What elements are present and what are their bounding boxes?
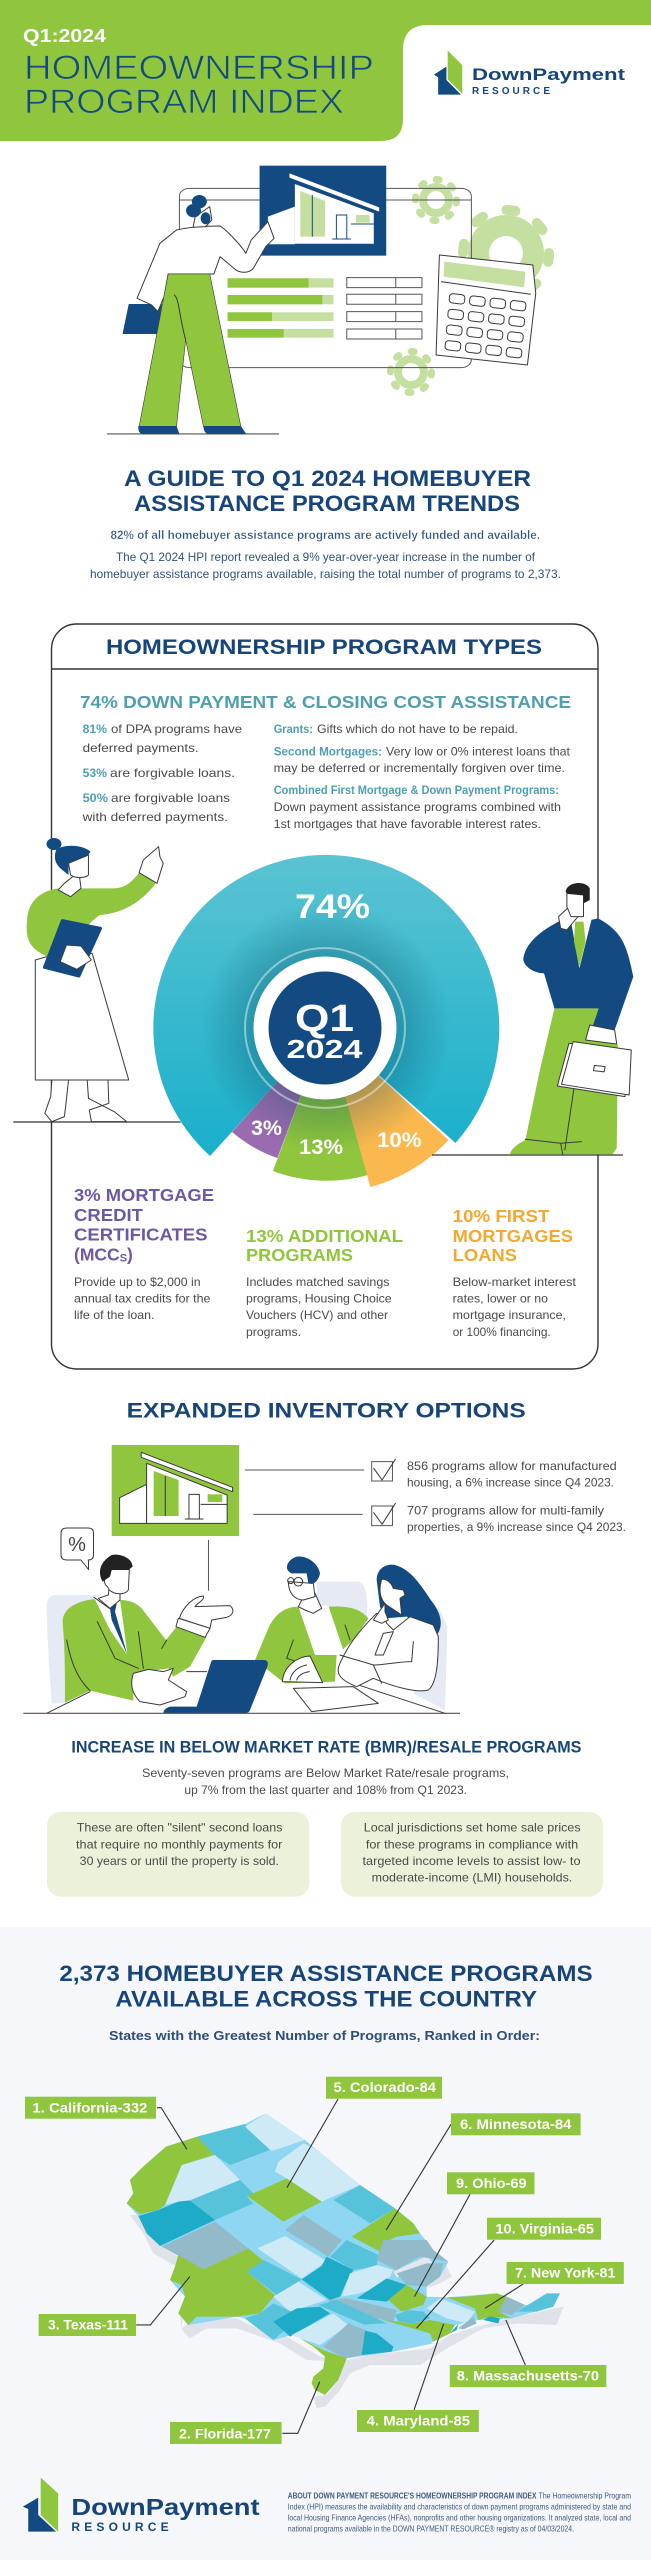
column: 10% first mortgages loans	[453, 1206, 577, 1339]
logo: Down Payment Resource	[434, 51, 625, 97]
callout: local jurisdictions: Local jurisdictions set home sale prices	[364, 1821, 581, 1835]
label: Maryland	[357, 2410, 479, 2432]
icon: percent speech bubble	[61, 1528, 94, 1570]
column: 3% mortgage credit certificates: life of the loan.	[74, 1308, 154, 1322]
column: 3% mortgage credit certificates: S	[120, 1253, 127, 1265]
label: Virginia: 10. Virginia-65	[495, 2221, 595, 2236]
icon: percent speech bubble: %	[68, 1534, 86, 1556]
heading: 2,373 programs	[59, 1961, 593, 2012]
BMR summary text: up 7% from the last quarter and 108% from Q1 2023.	[184, 1783, 467, 1797]
figure: man in green suit	[63, 1555, 233, 1705]
callout: silent second loans	[47, 1812, 309, 1897]
callout: local jurisdictions: targeted income levels to assist low- to	[362, 1854, 581, 1868]
column: 3% mortgage credit certificates: CREDIT	[74, 1205, 143, 1225]
label: Colorado: 5. Colorado-84	[334, 2080, 437, 2095]
main title: HOMEOWNERSHIP	[24, 49, 374, 87]
illustration: person at dashboard	[107, 166, 549, 434]
left column stats: 50%	[83, 791, 108, 805]
connector lines	[208, 1470, 364, 1591]
callout: local jurisdictions: for these programs in compliance with	[366, 1837, 578, 1851]
icon: gears	[390, 180, 549, 392]
state: Texas	[170, 2248, 275, 2325]
logo: Down Payment Resource: RESOURCE	[472, 86, 550, 97]
column: 3% mortgage credit certificates: CERTIFICATES	[74, 1225, 208, 1245]
label: Florida: 2. Florida-177	[179, 2426, 271, 2441]
quarter label: Q1:2024	[23, 26, 106, 46]
label: Ohio	[447, 2172, 534, 2194]
label: Minnesota: 6. Minnesota-84	[460, 2117, 572, 2132]
map land base	[127, 2113, 553, 2358]
icon: laptop	[163, 1660, 268, 1713]
figure: man with glasses	[255, 1556, 368, 1683]
map shadow	[130, 2215, 563, 2408]
column: 10% first mortgages loans: MORTGAGES	[453, 1226, 573, 1246]
intro text: 82% of all homebuyer assistance programs are actively funded and available.	[110, 528, 540, 542]
right column definitions: Combined First Mortgage & Down Payment Programs:	[274, 783, 559, 797]
label: Massachusetts: 8. Massachusetts-70	[457, 2369, 599, 2384]
callout: silent second loans: 30 years or until the property is sold.	[80, 1854, 279, 1868]
panel: map section background	[0, 1927, 651, 2560]
house image card	[260, 166, 386, 256]
intro text	[90, 528, 561, 581]
footer logo: RESOURCE	[71, 2520, 169, 2534]
column: 10% first mortgages loans: LOANS	[453, 1245, 517, 1265]
right column definitions: 1st mortgages that have favorable interest rates.	[274, 817, 541, 831]
multi-family text: properties, a 9% increase since Q4 2023.	[407, 1520, 626, 1534]
chairs	[47, 1582, 447, 1710]
right column definitions: Very low or 0% interest loans that	[386, 745, 571, 759]
right column definitions: Gifts which do not have to be repaid.	[317, 722, 518, 736]
right column definitions: Second Mortgages:	[274, 745, 382, 759]
slice values: 10%	[377, 1129, 422, 1152]
column: 13% additional programs: Includes matched savings	[246, 1275, 390, 1289]
multi-family text: 707 programs allow for multi-family	[407, 1503, 604, 1517]
figure: woman with long hair	[293, 1565, 441, 1712]
footer about text: ABOUT DOWN PAYMENT RESOURCE'S HOMEOWNERSHIP PROGRAM INDEX	[288, 2490, 537, 2500]
map labels	[25, 2077, 624, 2444]
label: New York: 7. New York-81	[515, 2266, 616, 2281]
panel: homeownership program types	[52, 624, 598, 1369]
callout: silent second loans: These are often "silent" second loans	[77, 1821, 282, 1835]
slice values	[251, 888, 422, 1159]
right column definitions: Down payment assistance programs combined with	[274, 800, 561, 814]
column: 3% mortgage credit certificates	[74, 1185, 214, 1322]
pie chart	[153, 855, 499, 1187]
slice: 3%	[232, 1028, 326, 1158]
column: 13% additional programs: 13% ADDITIONAL	[246, 1226, 403, 1246]
slice values: 3%	[251, 1117, 282, 1140]
left column stats: 81%	[83, 722, 107, 736]
left column stats: of DPA programs have	[111, 722, 242, 736]
column: 10% first mortgages loans: mortgage insurance,	[453, 1308, 566, 1322]
callout: silent second loans: that require no monthly payments for	[76, 1837, 282, 1851]
column: 3% mortgage credit certificates: annual tax credits for the	[74, 1292, 211, 1306]
states: west and central	[127, 2113, 420, 2345]
figure: woman pointing	[13, 838, 181, 1122]
label: Colorado	[326, 2077, 442, 2099]
main title: PROGRAM INDEX	[24, 83, 344, 121]
column: 3% mortgage credit certificates: )	[127, 1245, 133, 1265]
label: California	[25, 2097, 156, 2119]
heading: below market rate programs: INCREASE IN BELOW MARKET RATE (BMR)/RESALE PROGRAMS	[71, 1739, 581, 1757]
checkbox list	[372, 1459, 626, 1534]
column: 13% additional programs: programs.	[246, 1325, 301, 1339]
state: Minnesota	[352, 2208, 420, 2253]
footer about text	[288, 2490, 631, 2534]
label: Minnesota	[451, 2113, 581, 2135]
main title	[24, 49, 374, 121]
right column definitions: Grants:	[274, 722, 313, 736]
slice: 13%	[273, 1028, 368, 1181]
label: Maryland: 4. Maryland-85	[367, 2414, 471, 2429]
subheading: 74% down payment: 74% DOWN PAYMENT & CLOSING COST ASSISTANCE	[80, 692, 571, 712]
slice: 10%	[326, 1028, 448, 1187]
table line	[47, 1672, 445, 1713]
manufactured housing text	[407, 1459, 617, 1490]
callout: local jurisdictions: moderate-income (LMI) households.	[372, 1871, 572, 1885]
center label: Q1	[295, 998, 354, 1040]
state: Florida	[300, 2338, 347, 2395]
header banner	[0, 0, 651, 141]
left column stats: with deferred payments.	[81, 810, 228, 824]
left column stats: deferred payments.	[83, 741, 199, 755]
center label	[286, 998, 363, 1064]
slice values: 13%	[299, 1136, 343, 1159]
table cells	[347, 278, 422, 339]
logo: Down Payment Resource: DownPayment	[472, 65, 625, 84]
label: California: 1. California-332	[32, 2100, 147, 2115]
states: east	[300, 2240, 560, 2395]
right column definitions: may be deferred or incrementally forgiven over time.	[274, 761, 565, 775]
center label: 2024	[286, 1034, 363, 1064]
state: New York	[447, 2293, 512, 2320]
icon: calculator	[436, 255, 536, 365]
label: Texas	[39, 2314, 136, 2336]
illustration: meeting of three people	[23, 1555, 460, 1713]
footer about text: national programs available in the DOWN PAYMENT RESOURCE® registry as of 04/03/2024.	[288, 2524, 574, 2534]
section heading: guide: A GUIDE TO Q1 2024 HOMEBUYER	[124, 466, 531, 491]
label: Ohio: 9. Ohio-69	[456, 2176, 527, 2191]
column: 3% mortgage credit certificates: Provide up to $2,000 in	[74, 1275, 201, 1289]
heading: 2,373 programs: AVAILABLE ACROSS THE COUNTRY	[115, 1987, 537, 2012]
section heading: guide	[124, 466, 531, 516]
figure: man with briefcase	[432, 883, 633, 1155]
column: 10% first mortgages loans: 10% FIRST	[453, 1206, 550, 1226]
label: Massachusetts	[450, 2365, 606, 2387]
footer about text: The Homeownership Program	[539, 2490, 631, 2500]
section heading: guide: ASSISTANCE PROGRAM TRENDS	[134, 491, 520, 516]
heading: 2,373 programs: 2,373 HOMEBUYER ASSISTANCE PROGRAMS	[59, 1961, 593, 1986]
left column stats	[81, 722, 242, 824]
left column stats: are forgivable loans	[111, 791, 230, 805]
label: Texas: 3. Texas-111	[48, 2318, 128, 2333]
column: 10% first mortgages loans: rates, lower or no	[453, 1292, 548, 1306]
column: 3% mortgage credit certificates: 3% MORTGAGE	[74, 1185, 214, 1205]
lake shadow	[393, 2256, 433, 2277]
label: New York	[507, 2262, 624, 2284]
intro text: homebuyer assistance programs available, raising the total number of programs to 2,373.	[90, 567, 561, 581]
footer logo: DownPayment	[71, 2494, 260, 2520]
map callout lines	[136, 2099, 525, 2433]
state: Colorado	[247, 2178, 322, 2222]
BMR summary text: Seventy-seven programs are Below Market Rate/resale programs,	[142, 1766, 509, 1780]
intro text: The Q1 2024 HPI report revealed a 9% year-over-year increase in the number of	[116, 550, 536, 564]
progress bars	[228, 278, 333, 338]
column: 13% additional programs: Vouchers (HCV) and other	[246, 1308, 388, 1322]
manufactured housing text: 856 programs allow for manufactured	[407, 1459, 617, 1473]
map: United States	[127, 2113, 563, 2408]
callout: local jurisdictions	[341, 1812, 603, 1897]
label: Virginia	[487, 2218, 601, 2240]
label: Florida	[170, 2422, 282, 2444]
column: 13% additional programs	[246, 1226, 403, 1339]
column: 3% mortgage credit certificates: (MCC	[74, 1245, 120, 1265]
state: California	[127, 2137, 214, 2214]
map subheading: States with the Greatest Number of Programs, Ranked in Order:	[109, 2028, 540, 2043]
state: Ohio	[388, 2285, 427, 2312]
column: 10% first mortgages loans: or 100% financing.	[453, 1325, 551, 1339]
BMR summary text	[142, 1766, 509, 1797]
manufactured housing text: housing, a 6% increase since Q4 2023.	[407, 1476, 614, 1490]
icon: green house card	[112, 1445, 239, 1536]
column: 10% first mortgages loans: Below-market interest	[453, 1275, 577, 1289]
multi-family text	[407, 1503, 626, 1534]
figure: person pointing	[107, 195, 279, 434]
heading: expanded inventory options: EXPANDED INVENTORY OPTIONS	[127, 1400, 526, 1423]
right column definitions	[274, 722, 571, 831]
column: 13% additional programs: programs, Housing Choice	[246, 1292, 392, 1306]
icon: checkboxes	[372, 1459, 395, 1526]
slice: 74%	[153, 855, 499, 1156]
dashboard window	[179, 188, 471, 368]
panel heading: HOMEOWNERSHIP PROGRAM TYPES	[106, 636, 542, 659]
left column stats: 53%	[83, 766, 107, 780]
left column stats: are forgivable loans.	[110, 766, 235, 780]
column: 13% additional programs: PROGRAMS	[246, 1245, 353, 1265]
footer logo	[23, 2478, 260, 2534]
state: Virginia	[383, 2320, 455, 2342]
slice values: 74%	[295, 888, 370, 926]
